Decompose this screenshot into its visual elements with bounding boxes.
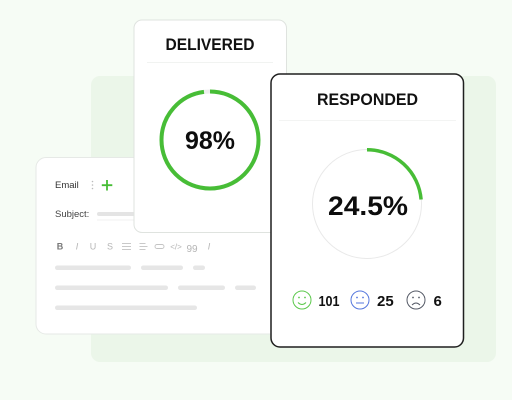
icon: happy face <box>293 291 311 309</box>
icon: drag dots <box>92 181 93 189</box>
icon: sad face <box>407 291 425 309</box>
happy count: 101 <box>318 293 340 310</box>
email label: Email <box>55 180 79 191</box>
panel: delivered <box>134 20 286 232</box>
formatting toolbar: B <box>57 242 64 252</box>
responded ring chart <box>312 150 422 258</box>
formatting toolbar <box>57 242 211 255</box>
formatting toolbar: U <box>90 242 96 252</box>
delivered ring chart <box>162 92 258 188</box>
subject label: Subject: <box>55 209 89 220</box>
sad count: 6 <box>434 293 442 310</box>
panel: responded <box>271 74 464 347</box>
formatting toolbar: I <box>208 242 211 252</box>
formatting toolbar: 99 <box>186 244 198 255</box>
heading: responded: RESPONDED <box>317 91 418 109</box>
subject placeholder bar <box>97 212 137 216</box>
icon: green plus <box>102 180 112 190</box>
green background panel <box>91 76 496 362</box>
formatting toolbar: S <box>107 242 113 252</box>
formatting toolbar: </> <box>170 242 182 252</box>
neutral count: 25 <box>377 293 394 310</box>
heading: delivered: DELIVERED <box>166 36 255 54</box>
formatting toolbar: I <box>76 242 79 252</box>
panel: email composer <box>36 158 286 334</box>
icon: neutral face <box>351 291 369 309</box>
responded percentage: 24.5% <box>328 191 408 221</box>
placeholder text lines <box>55 266 256 310</box>
delivered percentage: 98% <box>185 127 235 155</box>
